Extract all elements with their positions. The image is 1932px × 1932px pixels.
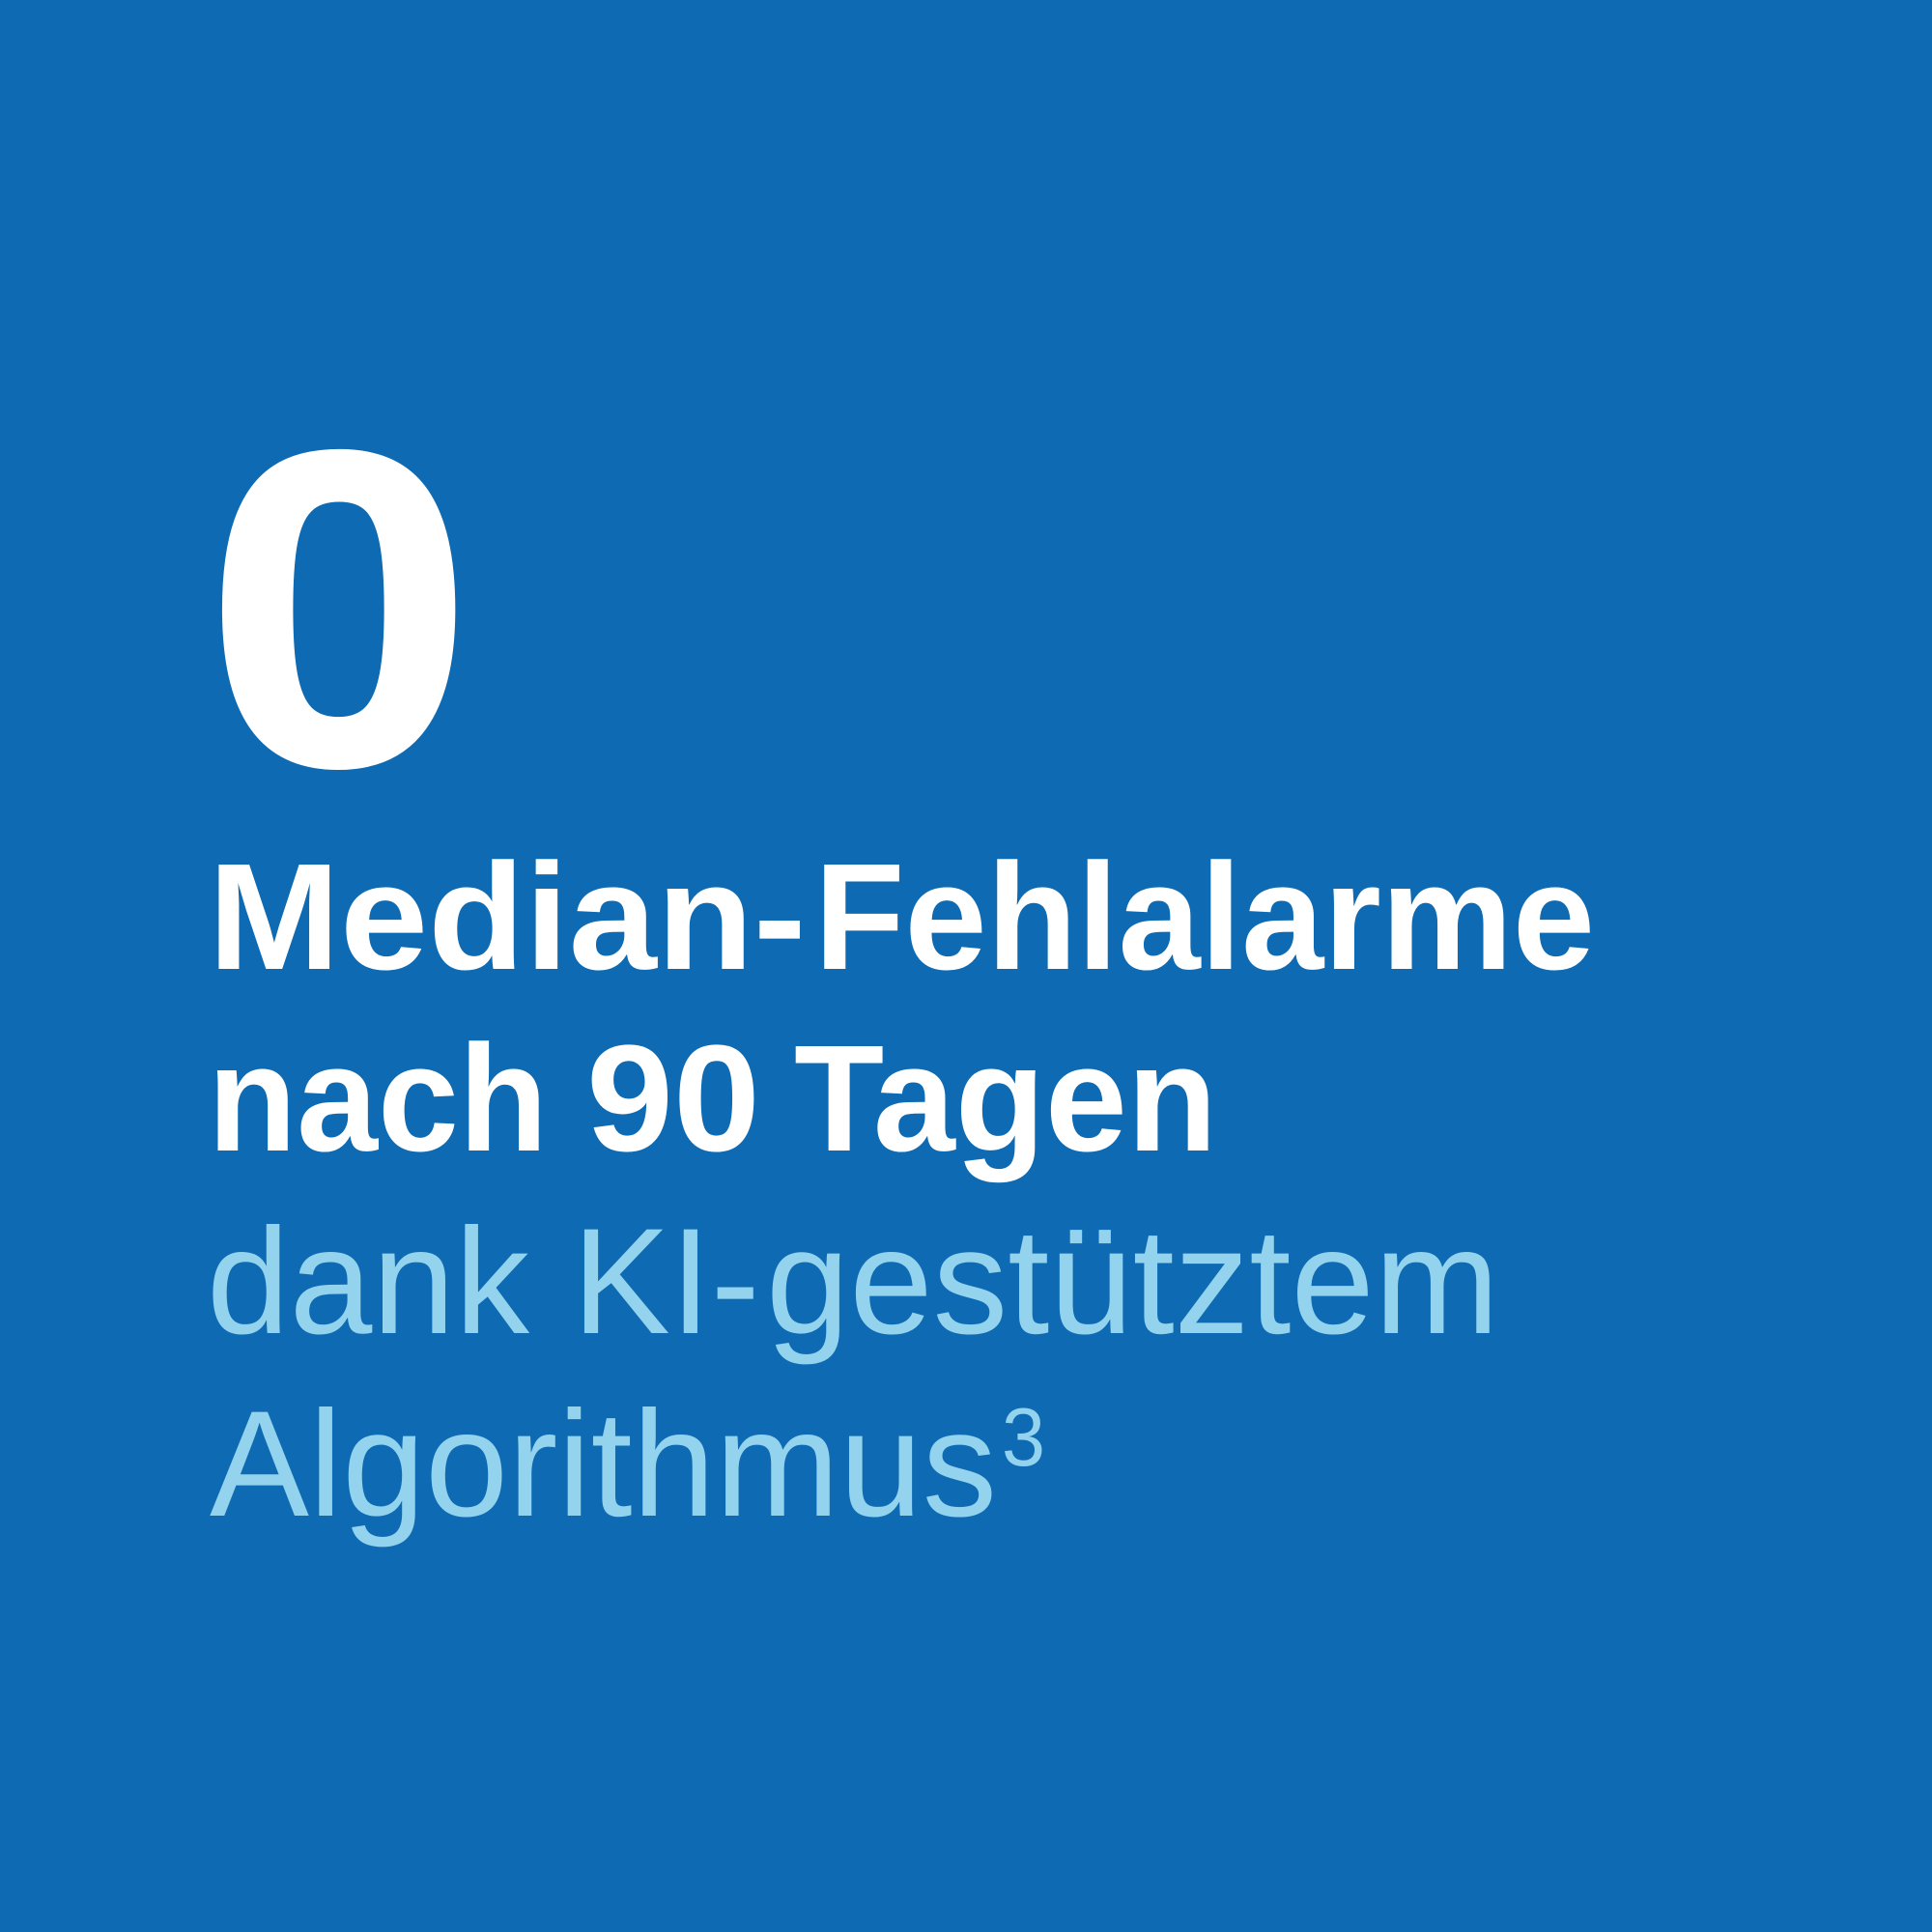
subheading line 1: gestütztem [766,1198,1499,1366]
headline line 2: 90 [586,1014,760,1183]
headline line 1: Fehlalarme [814,833,1595,1002]
headline line 2: Tagen [794,1014,1217,1183]
footnote marker 3: 3 [1002,1392,1045,1484]
subheading [207,1198,1499,1548]
subheading line 1: KI- [572,1198,759,1366]
subheading line 1: dank [207,1198,530,1366]
subheading line 2: Algorithmus [210,1380,997,1548]
headline line 2: nach [208,1014,548,1183]
big number: 0: 0 [206,359,472,858]
headline [208,833,1595,1183]
headline line 1: Median- [209,833,806,1002]
